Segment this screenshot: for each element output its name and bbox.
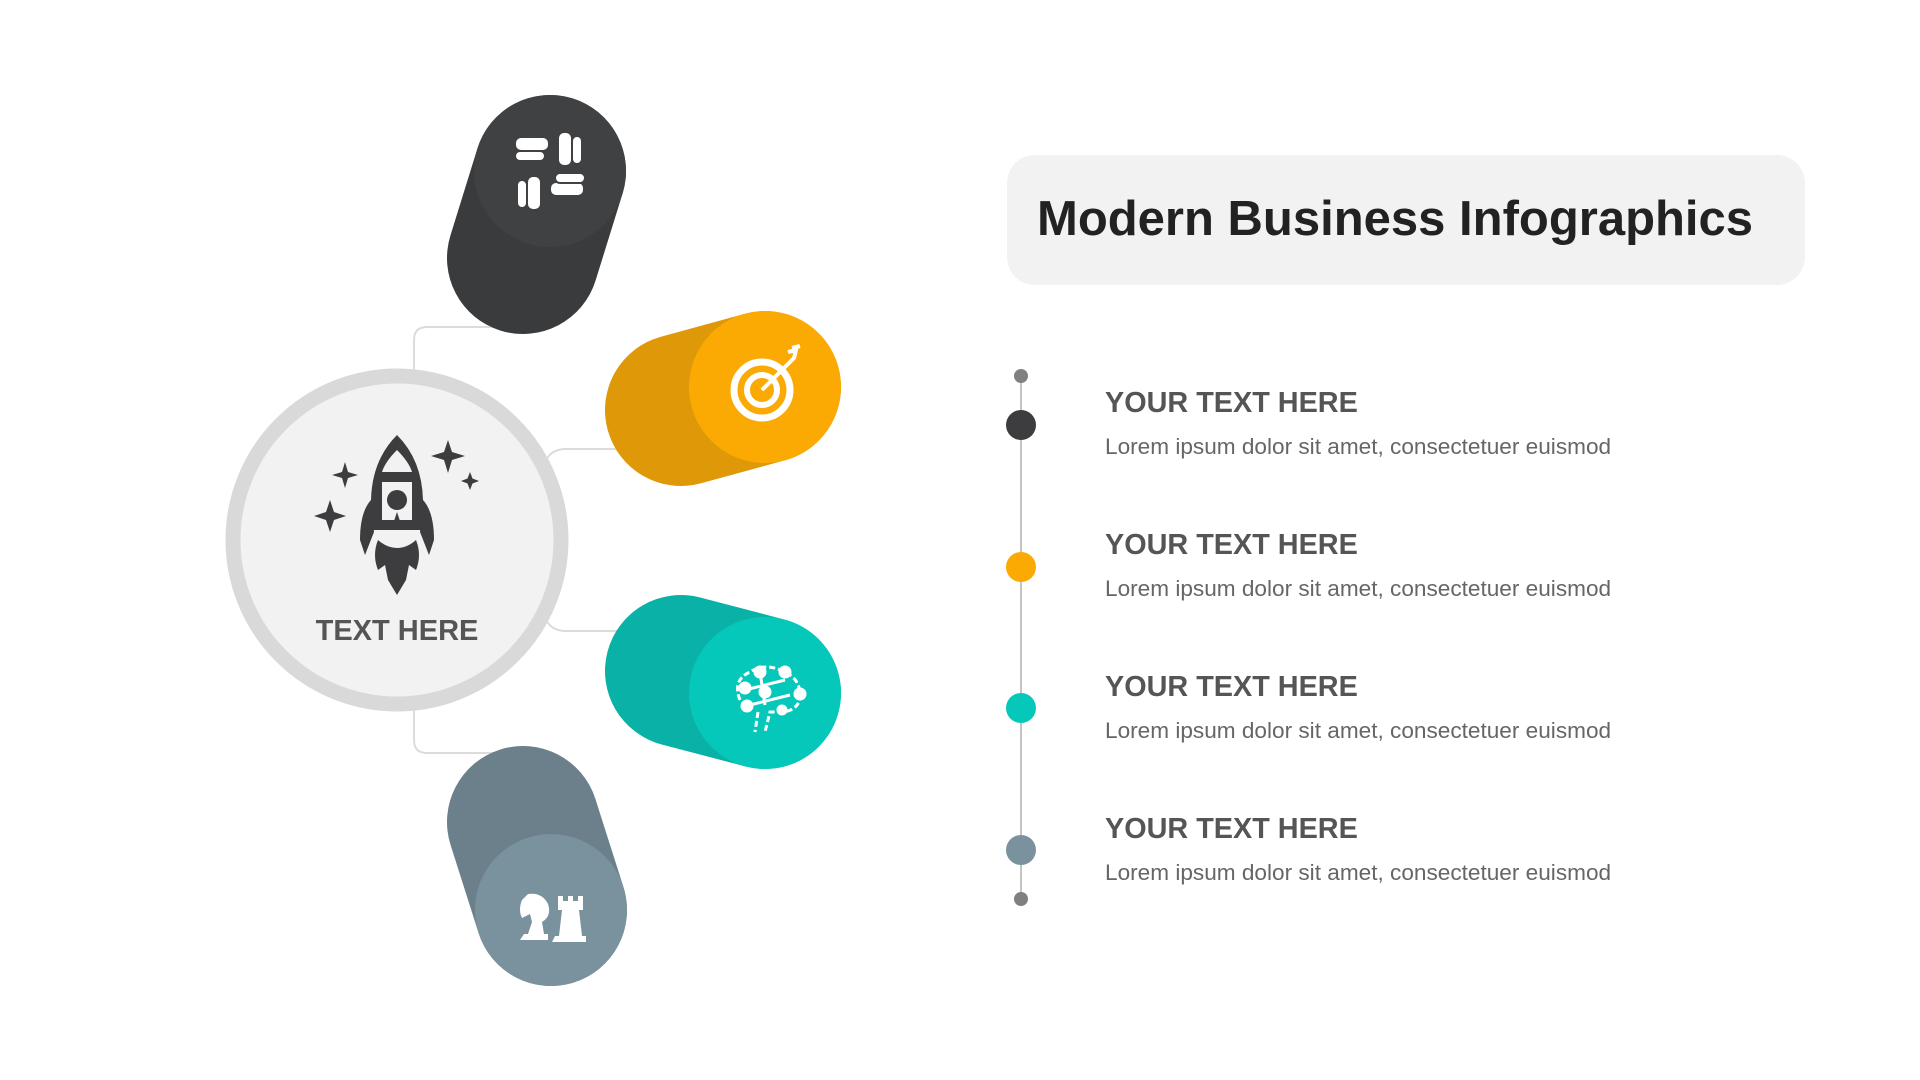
item 4: [1105, 813, 1611, 885]
item 3: YOUR TEXT HERE: [1105, 671, 1358, 703]
item 2: [1105, 529, 1611, 601]
timeline: [1006, 369, 1036, 906]
hub circle: [233, 376, 561, 704]
cylinder: dark: [474, 95, 626, 258]
cylinder: teal: [681, 617, 841, 769]
item 1: Lorem ipsum dolor sit amet, consectetuer euismod: [1105, 434, 1611, 459]
item 2: Lorem ipsum dolor sit amet, consectetuer euismod: [1105, 576, 1611, 601]
title panel: [1007, 155, 1805, 285]
item 3: [1105, 671, 1611, 743]
item 2: YOUR TEXT HERE: [1105, 529, 1358, 561]
item 4: Lorem ipsum dolor sit amet, consectetuer euismod: [1105, 860, 1611, 885]
icon: chess: [520, 894, 586, 942]
title: Modern Business Infographics: [1037, 192, 1753, 246]
icon: brain network: [738, 667, 805, 732]
icon: rocket: [314, 435, 479, 595]
item 1: YOUR TEXT HERE: [1105, 387, 1358, 419]
connector lines: [414, 327, 620, 753]
item 4: YOUR TEXT HERE: [1105, 813, 1358, 845]
cylinder: orange: [681, 311, 841, 463]
item 3: Lorem ipsum dolor sit amet, consectetuer euismod: [1105, 718, 1611, 743]
item 1: [1105, 387, 1611, 459]
icon: hands: [515, 132, 585, 210]
cylinder: slate: [475, 822, 627, 986]
icon: target: [734, 346, 800, 418]
hub label: TEXT HERE: [316, 615, 478, 647]
